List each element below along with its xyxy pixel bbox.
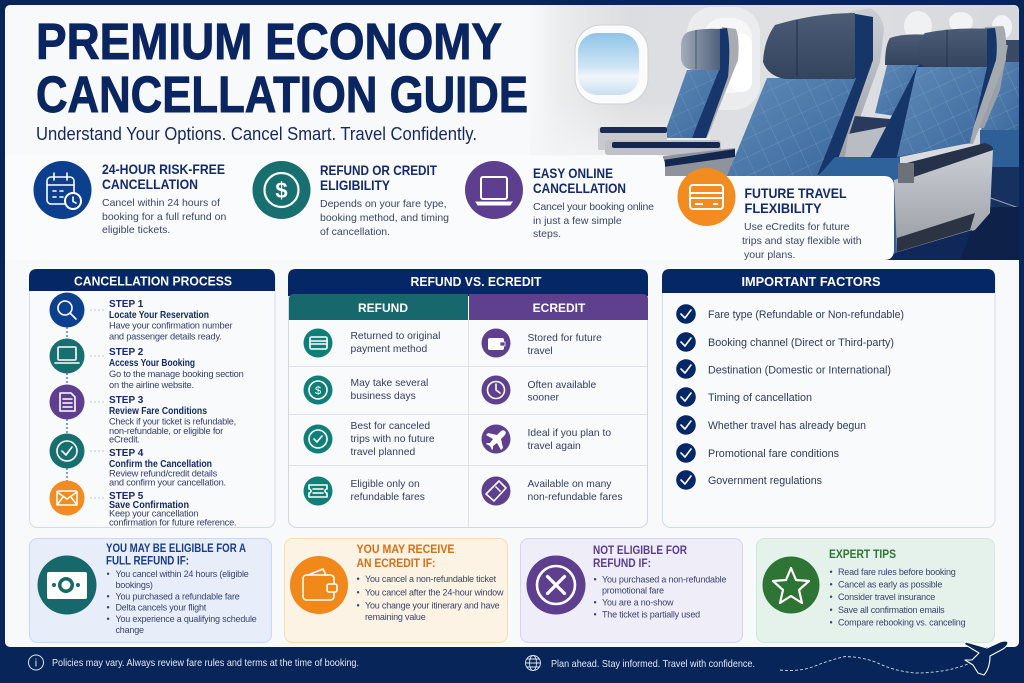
row: stored for future travel (482, 328, 602, 358)
list: bookings) (116, 580, 153, 590)
heading: FUTURE TRAVEL (744, 185, 847, 201)
row: eligible only on refundable fares (304, 476, 425, 506)
step 2: Access Your Booking (109, 358, 195, 369)
feature: future travel flexibility: FLEXIBILITY (744, 200, 822, 216)
icon: dollar: $ (275, 178, 288, 203)
description (102, 197, 226, 236)
description: Cancel your booking online (533, 201, 654, 213)
row: often available sooner: Often available (528, 380, 596, 391)
list: Save all confirmation emails (838, 605, 945, 615)
card: not eligible (520, 538, 742, 642)
row: best for canceled trips: Best for canceled (350, 421, 430, 432)
card: ecredit (284, 538, 508, 642)
footer (28, 641, 1008, 675)
step 2: STEP 2 (109, 347, 144, 358)
heading: REFUND IF: (593, 556, 651, 570)
factor: destination: Destination (Domestic or International) (708, 364, 891, 376)
factor: destination (676, 359, 891, 379)
row: ideal if you plan to travel again (482, 424, 611, 454)
row: available on many non-refundable fares (482, 476, 623, 506)
step 3 (50, 384, 236, 444)
description: in just a few simple (533, 215, 622, 227)
row: may take several business days: May take several (350, 378, 428, 389)
factor: government regulations (676, 470, 822, 490)
list: You cancel within 24 hours (eligible (116, 569, 249, 579)
row: available on many non-refundable fares: non-refundable fares (528, 492, 623, 503)
list: change (116, 625, 144, 635)
list: • (356, 574, 360, 584)
list: • (830, 567, 832, 577)
list: You change your itinerary and have (365, 600, 500, 610)
icon: wallet (290, 556, 348, 614)
feature band (5, 155, 894, 261)
list: • (356, 600, 360, 610)
row: may take several business days (304, 376, 428, 404)
list: You cancel after the 24-hour window (365, 588, 504, 598)
panel header (288, 269, 648, 296)
step 3: eCredit. (109, 434, 140, 444)
footer note: policies (28, 655, 359, 670)
list: • (106, 569, 110, 579)
far seat (875, 34, 928, 117)
title (36, 13, 528, 123)
list (106, 569, 257, 635)
list: • (830, 580, 832, 590)
heading (593, 543, 687, 570)
row: often available sooner: sooner (528, 392, 560, 404)
column header: refund (289, 294, 468, 320)
card: expert tips (756, 538, 994, 642)
factor: booking channel: Booking channel (Direct or Third-party) (708, 337, 894, 349)
row: returned to original payment method (304, 328, 440, 358)
panel header: CANCELLATION PROCESS (74, 274, 232, 288)
row: ideal if you plan to travel again: Ideal if you plan to (528, 428, 611, 439)
icon: airplane (964, 641, 1008, 675)
description: booking method, and timing (320, 212, 449, 224)
step 3: Check if your ticket is refundable, (109, 416, 236, 426)
feature: 24-hour risk-free cancellation: CANCELLATION (102, 176, 198, 192)
factor: travel begun: Whether travel has already begun (708, 420, 866, 432)
list (594, 574, 726, 620)
list: Consider travel insurance (838, 592, 935, 602)
row: stored for future travel: travel (528, 346, 553, 357)
icon: credit card (678, 168, 736, 226)
heading: EASY ONLINE (533, 165, 613, 181)
step 4: Review refund/credit details (109, 468, 218, 478)
description: trips and stay flexible with (742, 235, 862, 247)
row: best for canceled trips: trips with no future (350, 434, 435, 445)
step 1: STEP 1 (109, 299, 144, 310)
front right seat (870, 26, 1006, 158)
heading (356, 542, 454, 570)
list: • (106, 592, 110, 602)
tray console (818, 116, 902, 260)
step 2 (50, 338, 244, 390)
row: stored for future travel: Stored for future (528, 333, 602, 344)
heading (106, 541, 246, 568)
heading: YOU MAY BE ELIGIBLE FOR A (106, 541, 246, 555)
step 4: and confirm your cancellation. (109, 478, 226, 488)
list: You cancel a non-refundable ticket (365, 574, 497, 584)
description: of cancellation. (320, 226, 390, 238)
step 3: STEP 3 (109, 395, 144, 406)
row: ideal if you plan to travel again: travel again (528, 441, 581, 452)
list: You experience a qualifying schedule (116, 614, 257, 624)
footer note: policies: i (35, 658, 37, 670)
list: • (356, 588, 360, 598)
heading: YOU MAY RECEIVE (356, 542, 454, 556)
feature: easy online cancellation: CANCELLATION (533, 180, 626, 196)
step 5 (50, 480, 236, 528)
heading: NOT ELIGIBLE FOR (593, 543, 687, 557)
row: available on many non-refundable fares: Available on many (528, 479, 612, 490)
subtitle: Understand Your Options. Cancel Smart. Travel Confidently. (36, 124, 477, 144)
row: best for canceled trips (304, 421, 435, 458)
factor: promotional fare (676, 443, 839, 463)
right side row (960, 40, 1019, 260)
flight path (780, 656, 968, 673)
list: remaining value (365, 612, 426, 622)
factor: promotional fare: Promotional fare conditions (708, 448, 839, 460)
step 3: Review Fare Conditions (109, 406, 207, 417)
heading: AN ECREDIT IF: (356, 556, 436, 570)
list: Delta cancels your flight (116, 602, 207, 612)
step 5: Keep your cancellation (109, 508, 198, 518)
factor: fare type (676, 304, 904, 324)
list: You purchased a non-refundable (602, 574, 726, 584)
panel: refund vs. ecredit (288, 269, 648, 528)
card: full refund (30, 538, 272, 642)
list: • (830, 618, 832, 628)
panel header: REFUND VS. ECREDIT (410, 274, 542, 289)
list: The ticket is partially used (602, 610, 700, 620)
description: eligible tickets. (102, 224, 170, 236)
column header: refund: REFUND (358, 301, 408, 315)
description: steps. (533, 228, 561, 240)
step 4 (50, 434, 226, 488)
description: Cancel within 24 hours of (102, 197, 220, 209)
rear seat (598, 27, 739, 176)
factor: timing (676, 387, 812, 407)
big seat (727, 8, 884, 177)
footer note: plan ahead: Plan ahead. Stay informed. Travel with confidence. (551, 658, 755, 670)
list: Compare rebooking vs. canceling (838, 618, 966, 628)
ecredit rows (482, 328, 623, 506)
step 2: Go to the manage booking section (109, 369, 244, 379)
title: PREMIUM ECONOMY (36, 13, 502, 70)
factor: booking channel (676, 332, 894, 352)
icon: laptop (465, 161, 523, 219)
feature: future travel flexibility (678, 168, 862, 261)
icon: star (762, 556, 820, 614)
panel: cancellation process (29, 269, 275, 528)
step 5: confirmation for future reference. (109, 518, 236, 528)
row: best for canceled trips: travel planned (350, 447, 415, 458)
description (533, 201, 654, 240)
row: eligible only on refundable fares: refundable fares (350, 492, 425, 503)
list: You purchased a refundable fare (116, 592, 240, 602)
heading: FULL REFUND IF: (106, 554, 189, 568)
heading: EXPERT TIPS (829, 547, 896, 561)
list: You are a no-show (602, 598, 674, 608)
list: promotional fare (602, 586, 664, 596)
list: • (106, 602, 110, 612)
list: • (106, 614, 110, 624)
list: • (830, 592, 832, 602)
description: booking for a full refund on (102, 211, 226, 223)
description: Use eCredits for future (744, 221, 850, 233)
column header: ecredit: ECREDIT (533, 301, 586, 315)
list: • (594, 574, 596, 584)
step 1: Have your confirmation number (109, 320, 232, 330)
description: Depends on your fare type, (320, 198, 447, 210)
heading: 24-HOUR RISK-FREE (102, 161, 225, 177)
footer note: plan ahead (526, 656, 755, 670)
description (320, 198, 449, 238)
panel header: IMPORTANT FACTORS (742, 274, 881, 289)
step 1: Locate Your Reservation (109, 310, 209, 321)
icon: banknote (38, 556, 96, 614)
list: Cancel as early as possible (838, 580, 942, 590)
window (575, 25, 648, 104)
factor list (676, 304, 904, 490)
list: • (830, 605, 832, 615)
feature: refund or credit eligibility (252, 161, 449, 238)
step 5: Save Confirmation (109, 500, 189, 511)
icon: check (50, 434, 84, 468)
list: Read fare rules before booking (838, 567, 956, 577)
cabin photo (530, 5, 1020, 261)
distant windows (687, 7, 1012, 110)
footer note: policies: Policies may vary. Always review fare rules and terms at the time of booking. (52, 657, 359, 669)
step 3: non-refundable, or eligible for (109, 426, 223, 436)
row: eligible only on refundable fares: Eligible only on (350, 479, 420, 490)
icon: dollar (252, 161, 310, 219)
factor: fare type: Fare type (Refundable or Non-refundable) (708, 309, 904, 321)
step 4: STEP 4 (109, 448, 144, 459)
factor: timing: Timing of cancellation (708, 392, 812, 404)
feature: easy online cancellation (465, 161, 654, 240)
step 5: STEP 5 (109, 491, 144, 502)
column header: ecredit (469, 294, 648, 320)
panel header (29, 269, 275, 291)
panel: important factors (662, 269, 995, 528)
icon: magnifier (50, 292, 84, 328)
step 4: Confirm the Cancellation (109, 459, 212, 470)
factor: government regulations: Government regulations (708, 475, 822, 487)
list (830, 567, 966, 628)
panel header (662, 269, 995, 293)
step 1: and passenger details ready. (109, 332, 222, 342)
icon: laptop (50, 338, 84, 374)
heading: REFUND OR CREDIT (320, 162, 437, 178)
row: may take several business days: business days (350, 391, 416, 402)
icon: envelope (50, 480, 84, 516)
description (742, 221, 862, 261)
feature: 24-hour risk-free cancellation (34, 161, 226, 236)
list: • (594, 610, 596, 620)
list (356, 574, 504, 622)
step 1 (50, 292, 232, 342)
factor: travel begun (676, 415, 866, 435)
refund rows (304, 328, 440, 506)
icon: calendar and clock (34, 161, 92, 219)
icon: document (50, 384, 84, 420)
icon: cross circle (526, 556, 586, 614)
armrest (880, 143, 993, 260)
row: often available sooner (482, 376, 596, 404)
step 2: on the airline website. (109, 380, 194, 390)
title: CANCELLATION GUIDE (36, 66, 528, 123)
row: returned to original payment method: payment method (350, 344, 427, 355)
row: may take several business days: $ (315, 385, 321, 397)
list: • (594, 598, 596, 608)
feature: refund or credit eligibility: ELIGIBILITY (320, 177, 391, 193)
description: your plans. (744, 249, 795, 261)
row: returned to original payment method: Returned to original (350, 331, 440, 342)
